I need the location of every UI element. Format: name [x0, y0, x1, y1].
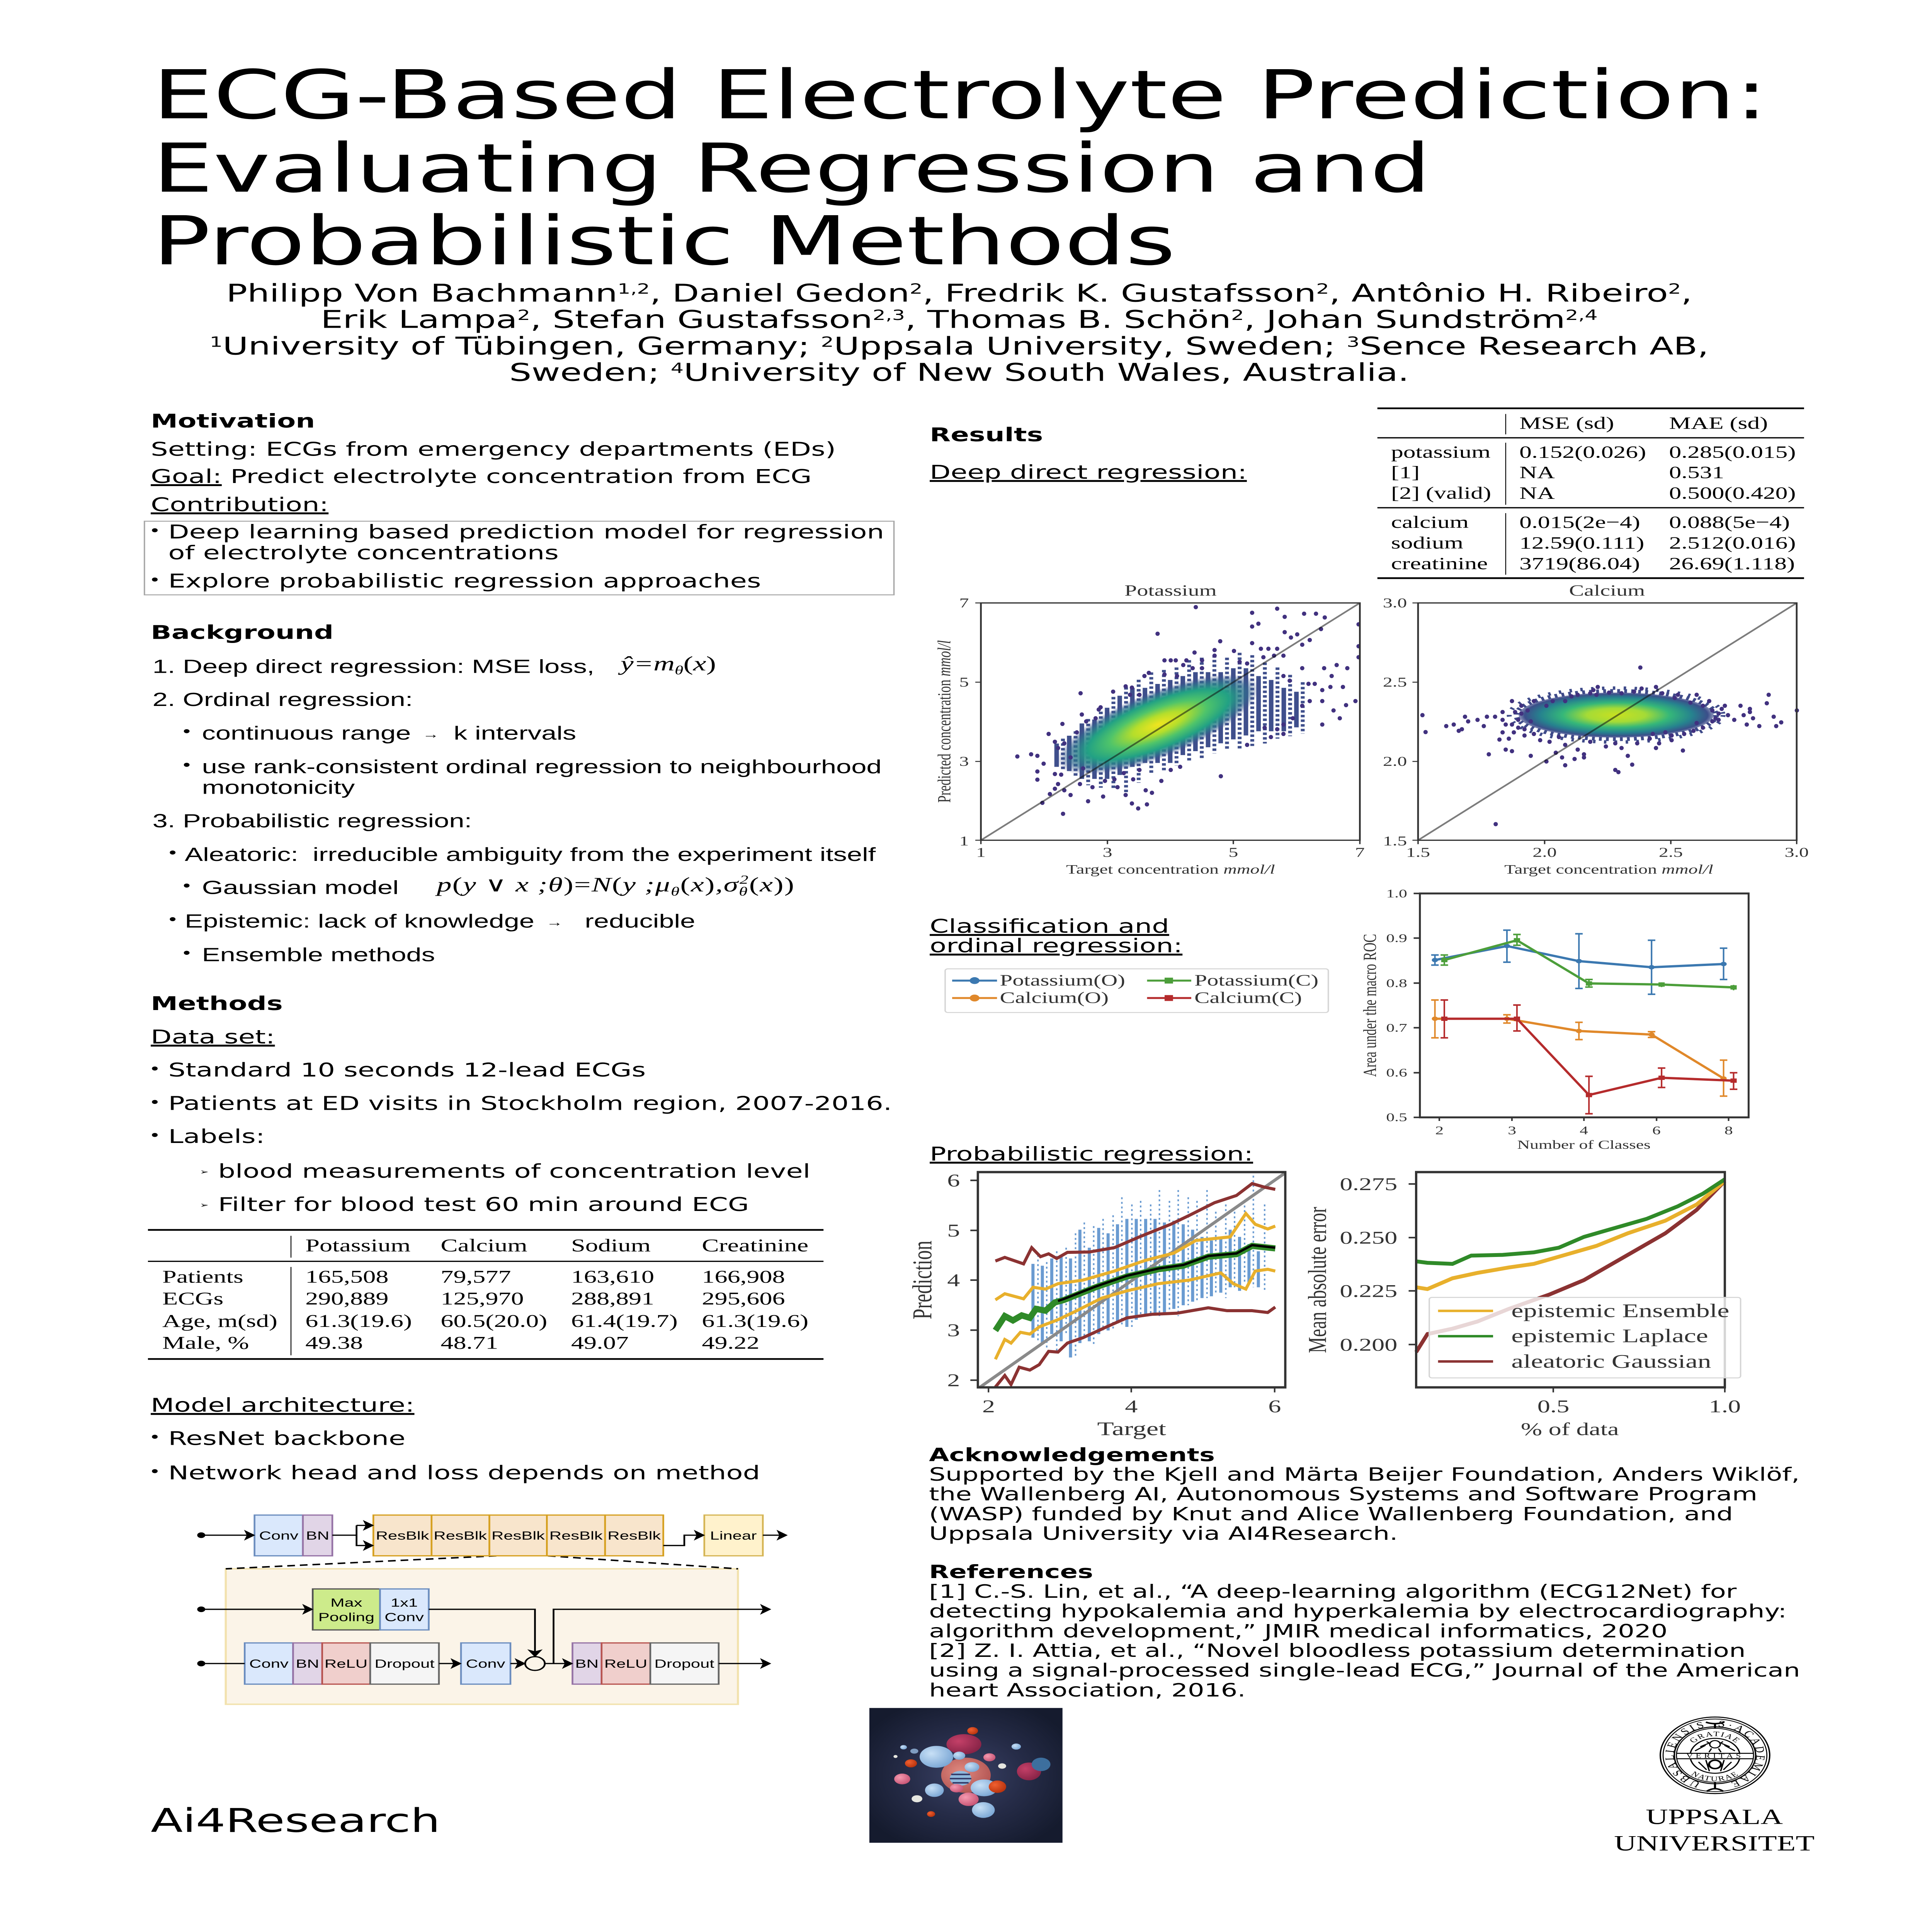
AUC labels: 2 — [1435, 1124, 1444, 1137]
calcium density — [1509, 688, 1723, 742]
authors and affiliations: Sence Research AB, — [1360, 332, 1709, 361]
diagram: network architecture — [198, 1515, 786, 1704]
text: acknowledgements body: Uppsala University via AI4Research. — [929, 1523, 1398, 1544]
AUC labels: 0.7 — [1386, 1022, 1407, 1034]
list: architecture: ResNet backbone — [168, 1428, 405, 1450]
list: background methods: continuous range — [202, 723, 411, 744]
residual block inner boxes — [245, 1589, 719, 1684]
authors and affiliations: Uppsala University, Sweden; — [834, 332, 1347, 361]
list: data set: • — [149, 1094, 161, 1111]
error plot legend: epistemic Laplace — [1511, 1325, 1708, 1347]
contribution box: • — [149, 572, 161, 588]
heading: motivation: Motivation — [151, 410, 315, 432]
logo: Uppsala University seal: UBSALIENSIS — [1663, 1719, 1708, 1789]
diagram: network architecture: ResBlk — [434, 1529, 487, 1542]
table: regression results: 3719(86.04) — [1519, 554, 1640, 573]
title: Evaluating Regression and — [153, 129, 1431, 207]
logo: Uppsala University seal: S·ACADEMIAE — [1717, 1719, 1767, 1790]
AUC labels — [1359, 888, 1733, 1151]
legend: classification chart: Calcium(O) — [1000, 989, 1109, 1007]
calcium labels: Calcium — [1569, 582, 1645, 599]
contribution box: • — [149, 523, 161, 539]
formula: gaussian model: x)) — [760, 873, 794, 896]
diagram: network architecture: Dropout — [375, 1657, 435, 1670]
list: background methods: • — [169, 911, 176, 927]
subheading: classification and ordinal regression: Classification and — [930, 915, 1169, 937]
prediction plot labels — [908, 1171, 1281, 1439]
list: data set: Standard 10 seconds 12-lead ECGs — [168, 1060, 646, 1081]
diagram: network architecture: Linear — [710, 1529, 757, 1542]
heading: references: References — [929, 1561, 1093, 1583]
AUC labels: 0.6 — [1386, 1066, 1407, 1079]
image: Ai4Research spheres artwork — [869, 1708, 1063, 1843]
subheading: probabilistic regression: Probabilistic regression: — [930, 1143, 1253, 1165]
list: data set: ➢ — [200, 1201, 209, 1209]
error plot labels: 0.5 — [1537, 1396, 1570, 1416]
authors and affiliations: 2 — [1316, 281, 1329, 297]
top row blocks — [255, 1515, 763, 1556]
potassium labels: Target concentration mmol/l — [1066, 862, 1275, 876]
expanded residual block panel — [226, 1556, 738, 1704]
formula: direct regression: ŷ=m — [621, 652, 675, 675]
list: background methods: • — [169, 844, 176, 861]
diagram: network architecture: BN — [306, 1529, 329, 1542]
formula: gaussian model: p(y ∨ x ;θ)=N(y ;μ — [437, 873, 670, 896]
prediction plot labels: 6 — [947, 1171, 960, 1190]
diagram: network architecture: ResBlk — [492, 1529, 545, 1542]
contribution box: Deep learning based prediction model for regression — [168, 521, 884, 543]
table: data set statistics: 166,908 — [702, 1267, 785, 1287]
table: regression results: NA — [1519, 463, 1555, 482]
legend: classification chart: Potassium(C) — [1194, 972, 1318, 989]
title — [153, 56, 1768, 280]
list: background methods — [153, 656, 882, 965]
potassium density core — [1037, 655, 1280, 793]
table: data set statistics: Calcium — [440, 1236, 527, 1255]
prediction plot labels: 4 — [947, 1270, 960, 1290]
list: background methods: Aleatoric: — [185, 844, 298, 865]
potassium labels: Potassium — [1124, 582, 1217, 599]
subheading: model architecture: Model architecture: — [151, 1395, 415, 1417]
text: acknowledgements body: (WASP) funded by Knut and Alice Wallenberg Foundation, and — [929, 1503, 1733, 1525]
potassium labels: 5 — [1228, 845, 1238, 860]
top row arrows — [198, 1526, 786, 1546]
chart: prediction vs target — [908, 1171, 1285, 1439]
table: regression results: 2.512(0.016) — [1669, 533, 1796, 552]
table: regression results: creatinine — [1391, 554, 1488, 573]
logo: Uppsala University seal: GRATIAE — [1687, 1730, 1743, 1745]
diagram: network architecture: ReLU — [604, 1657, 647, 1670]
potassium labels: 3 — [959, 754, 969, 769]
text: setting and goal: Goal: Predict electrolyte concentration from ECG — [151, 466, 812, 488]
authors and affiliations: 2 — [1231, 307, 1244, 323]
error plot labels: 0.250 — [1340, 1228, 1397, 1248]
text: acknowledgements body — [929, 1464, 1799, 1544]
diagram: network architecture: Conv — [249, 1657, 289, 1670]
calcium labels: Target concentration mmol/l — [1504, 862, 1713, 876]
calcium labels: 3.0 — [1785, 845, 1809, 860]
table: data set statistics — [148, 1230, 823, 1359]
prediction plot labels: 6 — [1268, 1396, 1281, 1416]
formula: gaussian model: θ — [671, 885, 679, 898]
prediction plot labels: Target — [1097, 1418, 1166, 1439]
AUC labels: 0.9 — [1386, 932, 1407, 945]
authors and affiliations: Sweden; — [509, 358, 660, 387]
diagram: network architecture: BN — [296, 1657, 319, 1670]
calcium axes — [1412, 603, 1797, 844]
list: background methods: reducible — [585, 910, 695, 932]
table: regression results: 26.69(1.118) — [1669, 554, 1795, 573]
list: background methods: • — [183, 756, 190, 773]
table: data set statistics: Sodium — [571, 1236, 651, 1255]
calcium labels: 2.0 — [1383, 754, 1407, 769]
potassium labels: 7 — [1355, 845, 1365, 860]
subheading: data set: Data set: — [151, 1026, 275, 1048]
authors and affiliations: , Daniel Gedon — [650, 279, 910, 308]
diagram: network architecture: Max — [330, 1596, 362, 1609]
prediction plot labels: Prediction — [908, 1241, 938, 1319]
chart: calcium scatter — [1383, 582, 1809, 876]
prediction plot labels: 5 — [947, 1221, 960, 1241]
table: data set statistics: 125,970 — [440, 1289, 524, 1309]
table: data set statistics: 49.38 — [305, 1333, 363, 1353]
panel: background — [151, 622, 882, 965]
diagram: network architecture: ResBlk — [607, 1529, 661, 1542]
list: background methods: 3. Probabilistic regression: — [153, 810, 472, 831]
text: reference list — [929, 1581, 1800, 1701]
authors and affiliations: 2,4 — [1565, 307, 1598, 323]
potassium labels: 1 — [976, 845, 986, 860]
table: regression results: MSE (sd) — [1519, 413, 1614, 432]
table: data set statistics: 79,577 — [440, 1267, 511, 1287]
error plot labels: 0.225 — [1340, 1281, 1397, 1301]
list: data set: Filter for blood test 60 min around ECG — [218, 1194, 749, 1216]
authors and affiliations: University of Tübingen, Germany; — [223, 332, 821, 361]
error plot legend: epistemic Ensemble — [1511, 1301, 1729, 1321]
table: data set statistics: 295,606 — [702, 1289, 785, 1309]
error plot labels: 1.0 — [1709, 1396, 1741, 1416]
AUC plot lines — [1413, 893, 1748, 1121]
table: regression results: 0.088(5e−4) — [1669, 512, 1790, 532]
authors and affiliations: 2 — [1668, 281, 1681, 297]
list: data set: • — [149, 1128, 161, 1144]
list: background methods: irreducible ambiguity from the experiment itself — [313, 844, 876, 865]
table: data set statistics: 61.3(19.6) — [702, 1311, 808, 1331]
list: background methods: Epistemic: lack of knowledge — [185, 910, 534, 932]
list: architecture: Network head and loss depends on method — [168, 1462, 760, 1484]
prediction plot labels: 4 — [1125, 1396, 1138, 1416]
error plot legend: aleatoric Gaussian — [1511, 1351, 1711, 1372]
authors and affiliations: , Fredrik K. Gustafsson — [923, 279, 1316, 308]
formula: gaussian model: ( — [749, 873, 759, 896]
table: regression results: 0.500(0.420) — [1669, 483, 1796, 502]
panel: references — [929, 1561, 1800, 1701]
authors and affiliations: 1,2 — [617, 281, 650, 297]
diagram: network architecture: 1x1 — [391, 1596, 418, 1609]
error plot lines — [1409, 1172, 1725, 1393]
diagram: network architecture: Conv — [466, 1657, 505, 1670]
list: background methods: use rank-consistent ordinal regression to neighbourhood — [202, 756, 882, 777]
text: acknowledgements body: Supported by the Kjell and Märta Beijer Foundation, Anders Wiklöf, — [929, 1464, 1799, 1485]
text: reference list: [1] C.-S. Lin, et al., “A deep-learning algorithm (ECG12Net) for — [929, 1581, 1737, 1602]
table: regression results: potassium — [1391, 442, 1491, 461]
diagram: network architecture: Conv — [259, 1529, 298, 1542]
table: regression results: MAE (sd) — [1669, 413, 1768, 432]
AUC labels: 1.0 — [1386, 888, 1407, 900]
panel: methods — [149, 993, 892, 1216]
legend: classification chart: Potassium(O) — [1000, 972, 1125, 989]
table: regression results: sodium — [1391, 533, 1463, 552]
authors and affiliations: 3 — [1347, 333, 1360, 350]
error plot labels: Mean absolute error — [1303, 1207, 1332, 1353]
list: data set: • — [149, 1061, 161, 1077]
text: reference list: using a signal-processed single-lead ECG,” Journal of the American — [929, 1660, 1800, 1681]
subheading: classification and ordinal regression — [930, 915, 1182, 957]
diagram: network architecture: BN — [575, 1657, 599, 1670]
list: background methods: k intervals — [454, 723, 576, 744]
list: data set: blood measurements of concentration level — [218, 1160, 810, 1182]
calcium labels: 2.0 — [1532, 845, 1557, 860]
heading: methods: Methods — [151, 993, 283, 1015]
text: setting and goal: Setting: ECGs from emergency departments (EDs) — [151, 439, 836, 461]
chart: mean absolute error vs percent of data — [1303, 1172, 1741, 1439]
list: background methods: 2. Ordinal regression: — [153, 689, 413, 710]
logo text: Uppsala Universitet — [1614, 1805, 1815, 1855]
contribution box — [145, 521, 894, 595]
list: background methods: Ensemble methods — [202, 944, 435, 965]
heading: results: Results — [930, 424, 1043, 446]
chart: classification AUC lines — [1359, 888, 1748, 1151]
text: reference list: [2] Z. I. Attia, et al., “Novel bloodless potassium determination — [929, 1640, 1746, 1661]
error plot legend — [1429, 1298, 1741, 1378]
subheading: deep direct regression: Deep direct regression: — [930, 461, 1247, 483]
diagram: network architecture: Pooling — [318, 1611, 374, 1624]
diagram: network architecture: ResBlk — [549, 1529, 603, 1542]
table: regression results — [1378, 408, 1804, 578]
formula: gaussian model: 2 — [740, 873, 748, 886]
table: data set statistics: Male, % — [162, 1333, 249, 1353]
formula: direct regression: θ — [675, 664, 683, 677]
list: data set: Patients at ED visits in Stockholm region, 2007-2016. — [168, 1093, 892, 1115]
table: data set statistics: ECGs — [162, 1289, 223, 1309]
calcium labels: 1.5 — [1383, 834, 1407, 849]
error plot labels — [1303, 1175, 1741, 1439]
authors and affiliations: 1 — [210, 333, 223, 350]
calcium labels: 2.5 — [1659, 845, 1683, 860]
AUC labels: 3 — [1508, 1124, 1516, 1137]
potassium outlier points — [1017, 607, 1359, 814]
potassium labels: 5 — [959, 675, 969, 690]
table: data set statistics: Potassium — [305, 1236, 411, 1255]
table: data set statistics: Patients — [162, 1267, 243, 1287]
list: background methods: • — [183, 877, 190, 894]
calcium labels: 3.0 — [1383, 596, 1407, 611]
heading: acknowledgements: Acknowledgements — [929, 1444, 1215, 1466]
legend: classification chart — [945, 969, 1328, 1012]
logo text: Uppsala Universitet: UNIVERSITET — [1614, 1832, 1815, 1855]
table: regression results: NA — [1519, 483, 1555, 502]
list: background methods: 1. Deep direct regression: MSE loss, — [153, 656, 594, 677]
authors and affiliations: 2 — [821, 333, 834, 350]
logo text: Uppsala Universitet: UPPSALA — [1646, 1805, 1783, 1829]
potassium labels: 7 — [959, 596, 969, 611]
formula: gaussian model: θ — [739, 885, 748, 898]
subheading: classification and ordinal regression: ordinal regression: — [930, 935, 1182, 957]
table: regression results: 12.59(0.111) — [1519, 533, 1644, 552]
list: background methods: Gaussian model — [202, 877, 399, 898]
authors and affiliations: University of New South Wales, Australia. — [684, 358, 1409, 387]
authors and affiliations: 2 — [517, 307, 530, 323]
chart: potassium scatter — [934, 582, 1365, 876]
potassium labels — [934, 582, 1365, 876]
diagram: network architecture: Dropout — [655, 1657, 714, 1670]
authors and affiliations: Philipp Von Bachmann — [226, 279, 617, 308]
logo: Uppsala University seal: NATURAE — [1689, 1770, 1741, 1783]
legend: classification chart: Calcium(C) — [1194, 989, 1302, 1007]
table: data set statistics: 61.3(19.6) — [305, 1311, 412, 1331]
logo: Uppsala University seal: VERITAS — [1686, 1753, 1744, 1760]
diagram: network architecture: ResBlk — [376, 1529, 429, 1542]
table: data set statistics: 163,610 — [571, 1267, 654, 1287]
authors and affiliations: , Johan Sundström — [1244, 305, 1565, 334]
table: regression results: [1] — [1391, 463, 1420, 482]
formula: gaussian model: ( — [680, 873, 690, 896]
text: acknowledgements body: the Wallenberg AI, Autonomous Systems and Software Program — [929, 1483, 1757, 1505]
table: regression results: 0.285(0.015) — [1669, 442, 1796, 461]
table: data set statistics: 165,508 — [305, 1267, 388, 1287]
potassium axes — [975, 603, 1360, 844]
table: regression results: calcium — [1391, 512, 1469, 532]
error plot labels: 0.200 — [1340, 1335, 1397, 1355]
calcium points — [1422, 668, 1797, 824]
authors and affiliations: , Stefan Gustafsson — [530, 305, 872, 334]
text: setting and goal: Contribution: — [151, 494, 328, 516]
logo text: Ai4Research: Ai4Research — [151, 1801, 440, 1840]
list: background methods: • — [183, 944, 190, 961]
logo: Uppsala University seal — [1660, 1717, 1770, 1794]
list: background methods: monotonicity — [202, 777, 355, 798]
authors and affiliations: 2,3 — [872, 307, 905, 323]
AUC labels: 0.8 — [1386, 977, 1407, 990]
panel: motivation — [145, 410, 894, 595]
prediction plot data — [970, 1172, 1285, 1393]
diagram: network architecture: Conv — [384, 1611, 424, 1624]
table: regression results: 0.531 — [1669, 463, 1724, 482]
list: background methods: • — [183, 723, 190, 739]
AUC labels: 4 — [1580, 1124, 1588, 1137]
potassium labels: 3 — [1103, 845, 1112, 860]
table: regression results: 0.015(2e−4) — [1519, 512, 1640, 532]
formula: direct regression: ( — [683, 652, 693, 675]
formula: gaussian model: x),σ — [691, 873, 738, 896]
list: architecture: • — [149, 1464, 161, 1480]
table: data set statistics: 288,891 — [571, 1289, 654, 1309]
contribution box: Explore probabilistic regression approaches — [168, 570, 761, 592]
list: architecture: • — [149, 1429, 161, 1446]
title: Probabilistic Methods — [153, 202, 1175, 280]
heading: background: Background — [151, 622, 333, 644]
AUC labels: 0.5 — [1386, 1111, 1407, 1124]
table: regression results: 0.152(0.026) — [1519, 442, 1646, 461]
residual block arrows — [198, 1607, 770, 1670]
calcium labels: 1.5 — [1406, 845, 1430, 860]
calcium labels — [1383, 582, 1809, 876]
table: data set statistics: 60.5(20.0) — [440, 1311, 547, 1331]
formula: direct regression: x) — [693, 652, 716, 675]
AUC labels: 8 — [1725, 1124, 1733, 1137]
potassium density columns — [1057, 668, 1296, 779]
AUC labels: Area under the macro ROC — [1359, 934, 1380, 1077]
AUC labels: 6 — [1652, 1124, 1661, 1137]
potassium labels: Predicted concentration mmol/l — [934, 640, 954, 803]
potassium labels: 1 — [959, 834, 969, 849]
authors and affiliations: 4 — [671, 360, 684, 376]
authors and affiliations — [210, 279, 1709, 387]
table: data set statistics: 61.4(19.7) — [571, 1311, 678, 1331]
table: regression results: [2] (valid) — [1391, 483, 1491, 502]
list: data set: Labels: — [168, 1126, 265, 1148]
authors and affiliations: , — [1681, 279, 1692, 308]
error plot labels: 0.275 — [1340, 1175, 1397, 1194]
text: reference list: heart Association, 2016. — [929, 1680, 1246, 1701]
table: data set statistics: 290,889 — [305, 1289, 388, 1309]
list: data set — [149, 1060, 892, 1216]
authors and affiliations: , Antônio H. Ribeiro — [1329, 279, 1668, 308]
table: data set statistics: Age, m(sd) — [162, 1311, 277, 1331]
text: setting and goal — [151, 439, 836, 516]
prediction plot labels: 2 — [982, 1396, 995, 1416]
calcium labels: 2.5 — [1383, 675, 1407, 690]
panel: model architecture — [149, 1395, 760, 1484]
authors and affiliations: Erik Lampa — [321, 305, 517, 334]
table: data set statistics: 49.22 — [702, 1333, 759, 1353]
list: data set: ➢ — [200, 1167, 209, 1176]
table: data set statistics: 49.07 — [571, 1333, 629, 1353]
prediction plot labels: 2 — [947, 1371, 960, 1390]
prediction plot labels: 3 — [947, 1320, 960, 1340]
error plot labels: % of data — [1521, 1419, 1619, 1439]
authors and affiliations: , Thomas B. Schön — [905, 305, 1231, 334]
table: data set statistics: Creatinine — [702, 1236, 808, 1255]
panel: acknowledgements — [929, 1444, 1799, 1544]
AUC labels: Number of Classes — [1517, 1138, 1651, 1151]
contribution box: of electrolyte concentrations — [168, 542, 559, 564]
table: data set statistics: 48.71 — [440, 1333, 498, 1353]
list: background methods: → — [422, 728, 439, 741]
diagram: network architecture: ReLU — [325, 1657, 367, 1670]
authors and affiliations: 2 — [910, 281, 923, 297]
text: reference list: algorithm development,” JMIR medical informatics, 2020 — [929, 1620, 1668, 1642]
title: ECG-Based Electrolyte Prediction: — [153, 56, 1768, 134]
text: reference list: detecting hypokalemia and hyperkalemia by electrocardiography: — [929, 1600, 1787, 1622]
list: architecture — [149, 1428, 760, 1484]
list: background methods: → — [546, 915, 563, 929]
